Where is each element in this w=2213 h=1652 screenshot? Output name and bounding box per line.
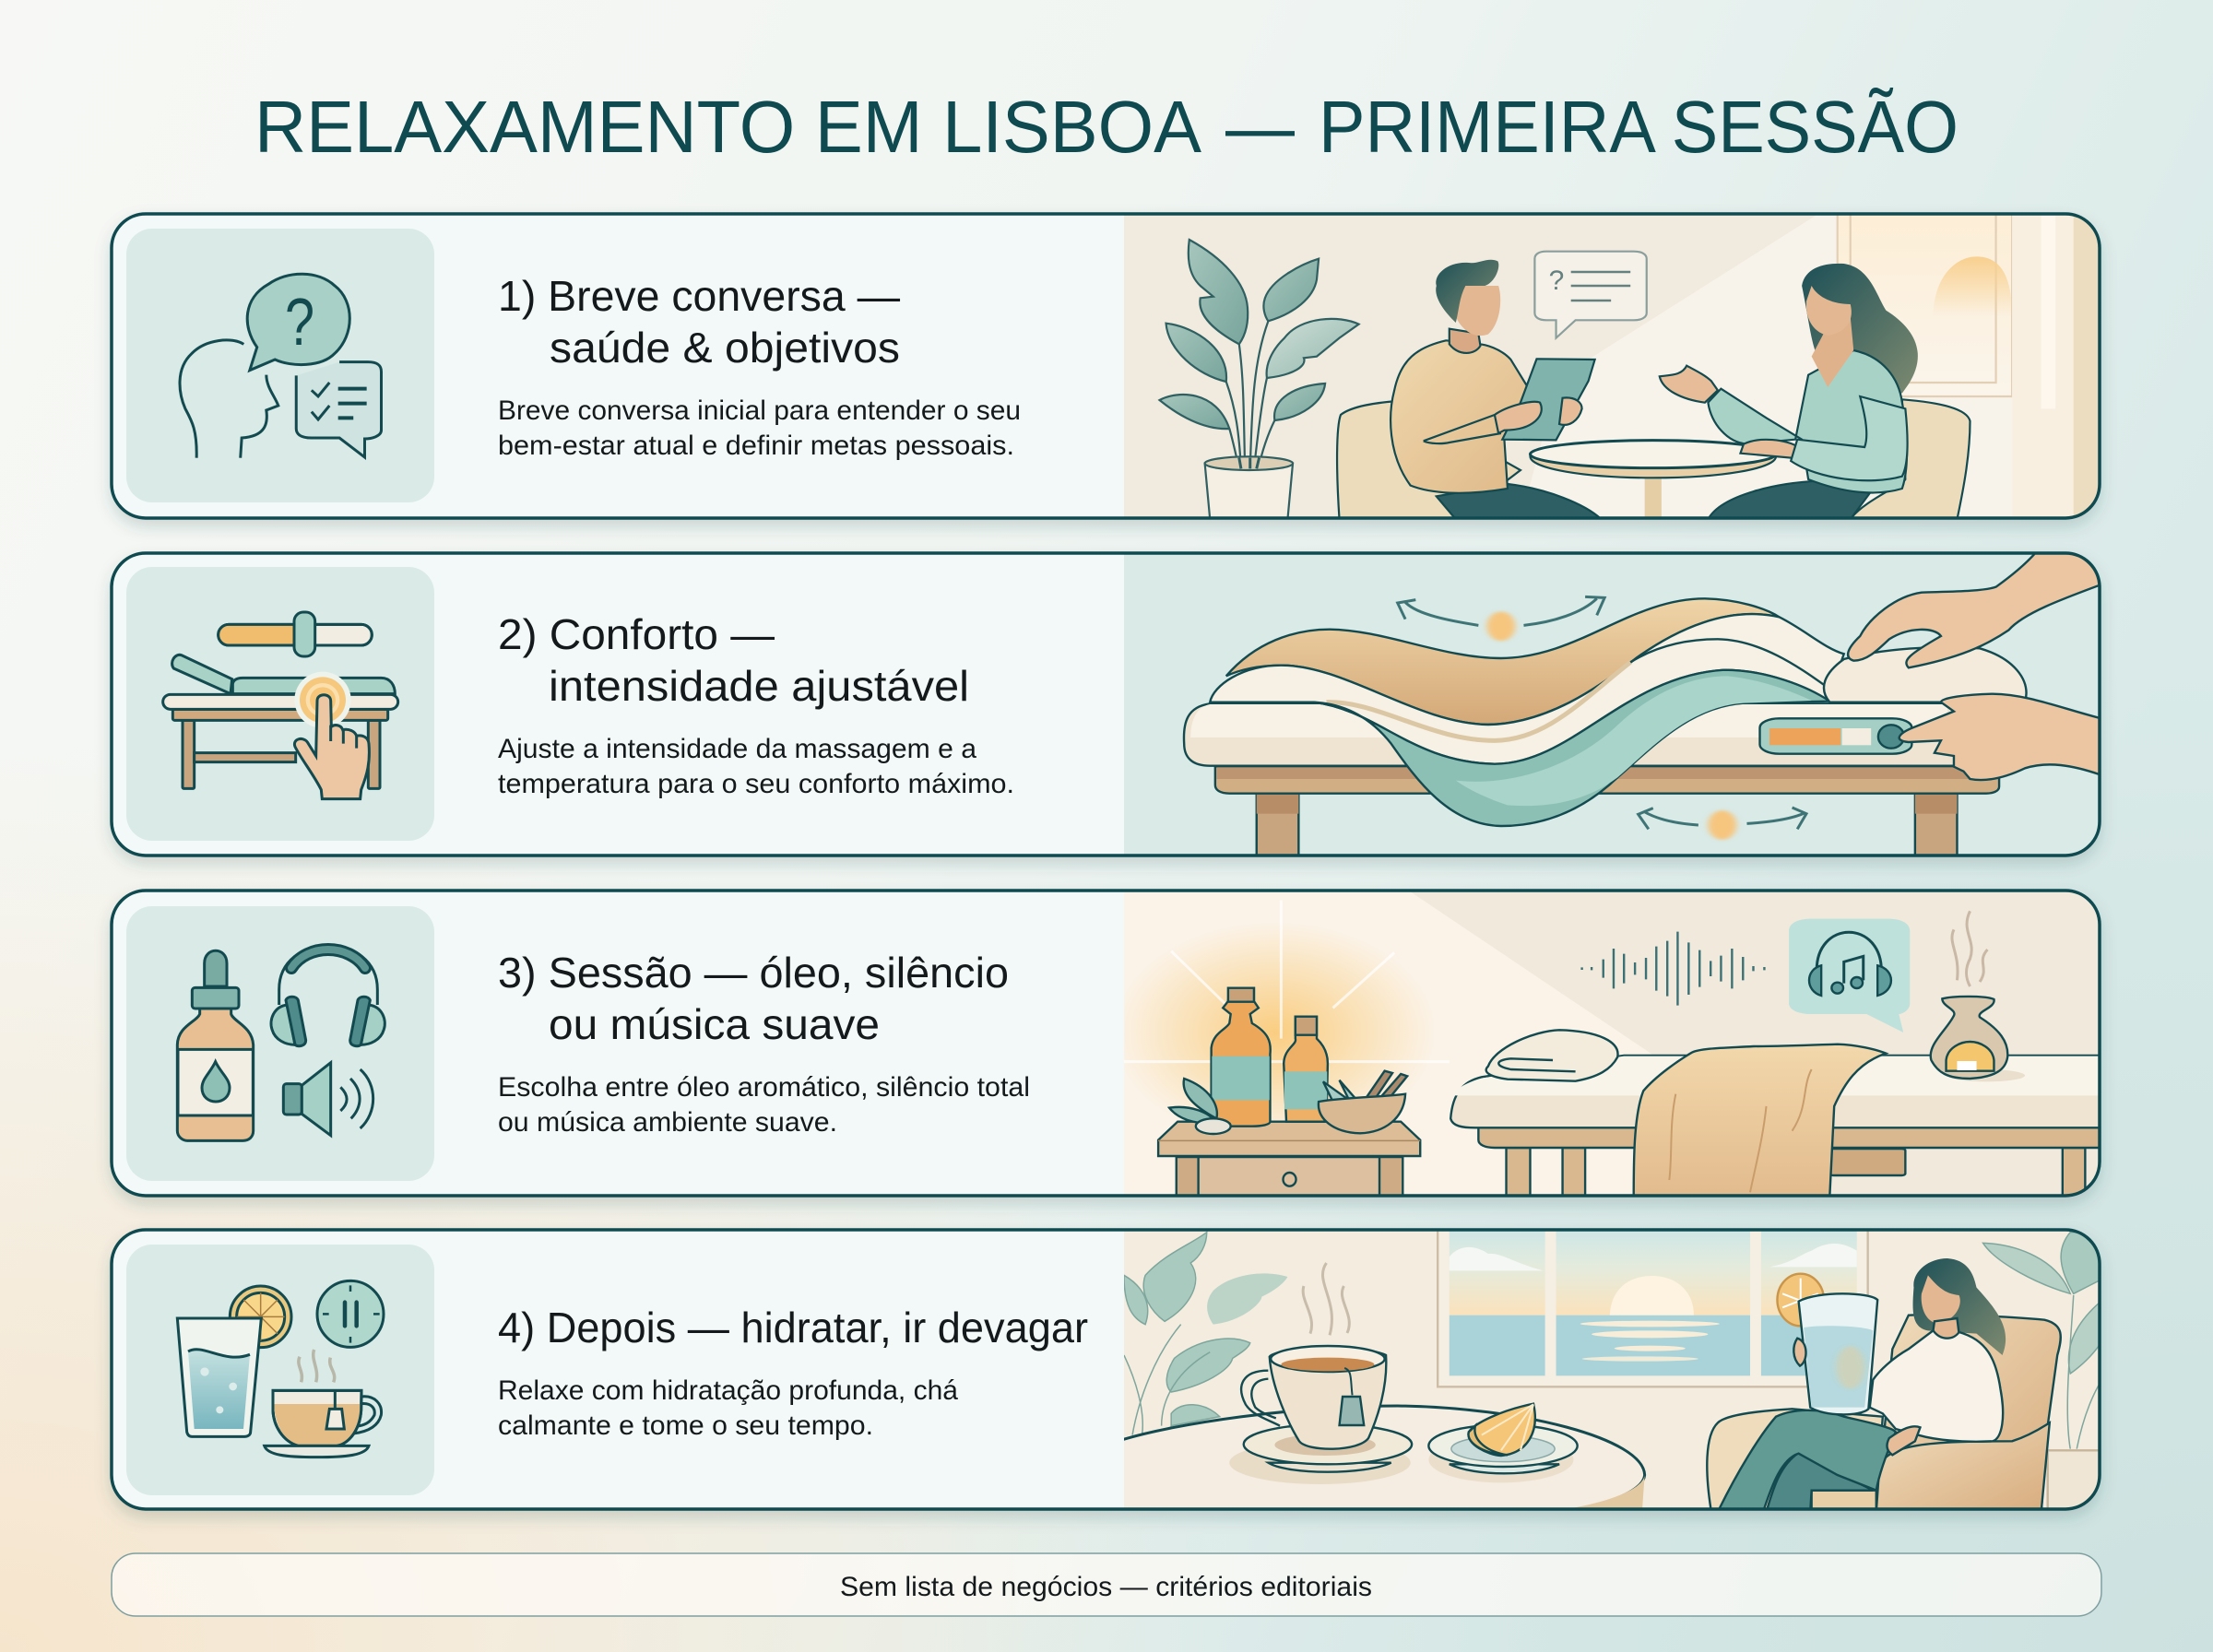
step 1 text: bem-estar atual e definir metas pessoais. xyxy=(498,431,1014,461)
left chair xyxy=(1337,401,1521,519)
step 1 text: saúde & objetivos xyxy=(550,324,900,372)
plate with lemon xyxy=(1428,1436,1573,1482)
blanket layers xyxy=(1226,598,1780,725)
card border xyxy=(112,891,2100,1196)
table xyxy=(1645,478,1662,516)
right plant xyxy=(1983,1233,2115,1449)
waveform xyxy=(1582,932,1764,1006)
icon tile: conversation xyxy=(126,229,434,502)
arrows xyxy=(1398,596,1604,625)
burner xyxy=(1947,1069,2025,1081)
step 3 text: 3) Sessão — óleo, silêncio xyxy=(498,949,1009,997)
step 4 text xyxy=(498,1304,1088,1441)
pillow xyxy=(1824,647,2026,702)
step 1 text: 1) Breve conversa — xyxy=(498,272,900,320)
step 4 text: Relaxe com hidratação profunda, chá xyxy=(498,1375,958,1406)
step 2 text: Ajuste a intensidade da massagem e a xyxy=(498,734,976,764)
mattress xyxy=(1184,703,1963,766)
step 3 text: ou música suave xyxy=(549,1000,880,1048)
steam xyxy=(1303,1263,1349,1335)
title: RELAXAMENTO EM LISBOA xyxy=(254,86,1202,168)
hand lower xyxy=(1899,694,2115,781)
woman xyxy=(1718,1258,2006,1512)
card border xyxy=(112,553,2100,856)
card border xyxy=(112,214,2100,518)
illustration: massage table with blanket xyxy=(1124,550,2115,859)
left plant xyxy=(1124,1233,1287,1435)
control xyxy=(1760,718,1911,754)
illustration: oils, sound and aroma xyxy=(1113,890,2115,1197)
icon tile: oil, headphones, speaker xyxy=(126,906,434,1181)
icon tile: adjustable table xyxy=(126,567,434,841)
step 2 text: temperatura para o seu conforto máximo. xyxy=(498,769,1014,799)
round table xyxy=(1113,1406,1645,1512)
glass with lemon xyxy=(1777,1274,1824,1326)
step 2 text: 2) Conforto — xyxy=(498,610,775,658)
title xyxy=(254,86,1959,168)
title: PRIMEIRA SESSÃO xyxy=(1319,86,1959,168)
table xyxy=(1507,1148,1530,1197)
icon tile: conversation: ? xyxy=(285,285,314,359)
window xyxy=(1438,1228,1868,1386)
man xyxy=(1391,260,1602,519)
hand upper xyxy=(1848,550,2115,667)
question bubble xyxy=(1534,252,1647,338)
blanket xyxy=(1634,1044,1886,1197)
step 1 text: Breve conversa inicial para entender o seu xyxy=(498,395,1021,426)
footer note: Sem lista de negócios — critérios editoriais xyxy=(840,1572,1372,1602)
card border xyxy=(112,1230,2100,1509)
step 2 text: intensidade ajustável xyxy=(549,662,969,710)
icon tile: water, tea, pause xyxy=(126,1245,434,1495)
step 3 text: Escolha entre óleo aromático, silêncio total xyxy=(498,1072,1030,1103)
step 1 text xyxy=(498,272,1021,461)
step 4 text: calmante e tome o seu tempo. xyxy=(498,1410,873,1441)
step 3 text: ou música ambiente suave. xyxy=(498,1107,837,1138)
panel: step 4 xyxy=(112,1228,2115,1512)
music bubble xyxy=(1789,919,1910,1032)
step 4 text: 4) Depois — hidratar, ir devagar xyxy=(498,1304,1088,1351)
towel xyxy=(1486,1030,1618,1081)
bottles xyxy=(1212,988,1271,1127)
legs and frame xyxy=(1257,793,1298,859)
tea cup xyxy=(1229,1441,1411,1484)
panel: step 3 xyxy=(112,890,2115,1197)
illustration: consultation at table: ? xyxy=(1549,266,1564,296)
illustration: consultation at table xyxy=(1124,212,2115,519)
panel: step 2 xyxy=(112,550,2115,859)
plant xyxy=(1160,240,1359,519)
panel: step 1 xyxy=(112,212,2115,519)
illustration: tea and water by the window xyxy=(1113,1228,2115,1512)
side table xyxy=(1177,1157,1402,1197)
step 3 text xyxy=(498,949,1030,1138)
bowl xyxy=(1362,1071,1392,1103)
woman xyxy=(1660,264,1970,519)
step 2 text xyxy=(498,610,1014,799)
title: — xyxy=(1225,86,1295,168)
armchair xyxy=(1876,1315,2061,1512)
footer note xyxy=(112,1553,2101,1616)
